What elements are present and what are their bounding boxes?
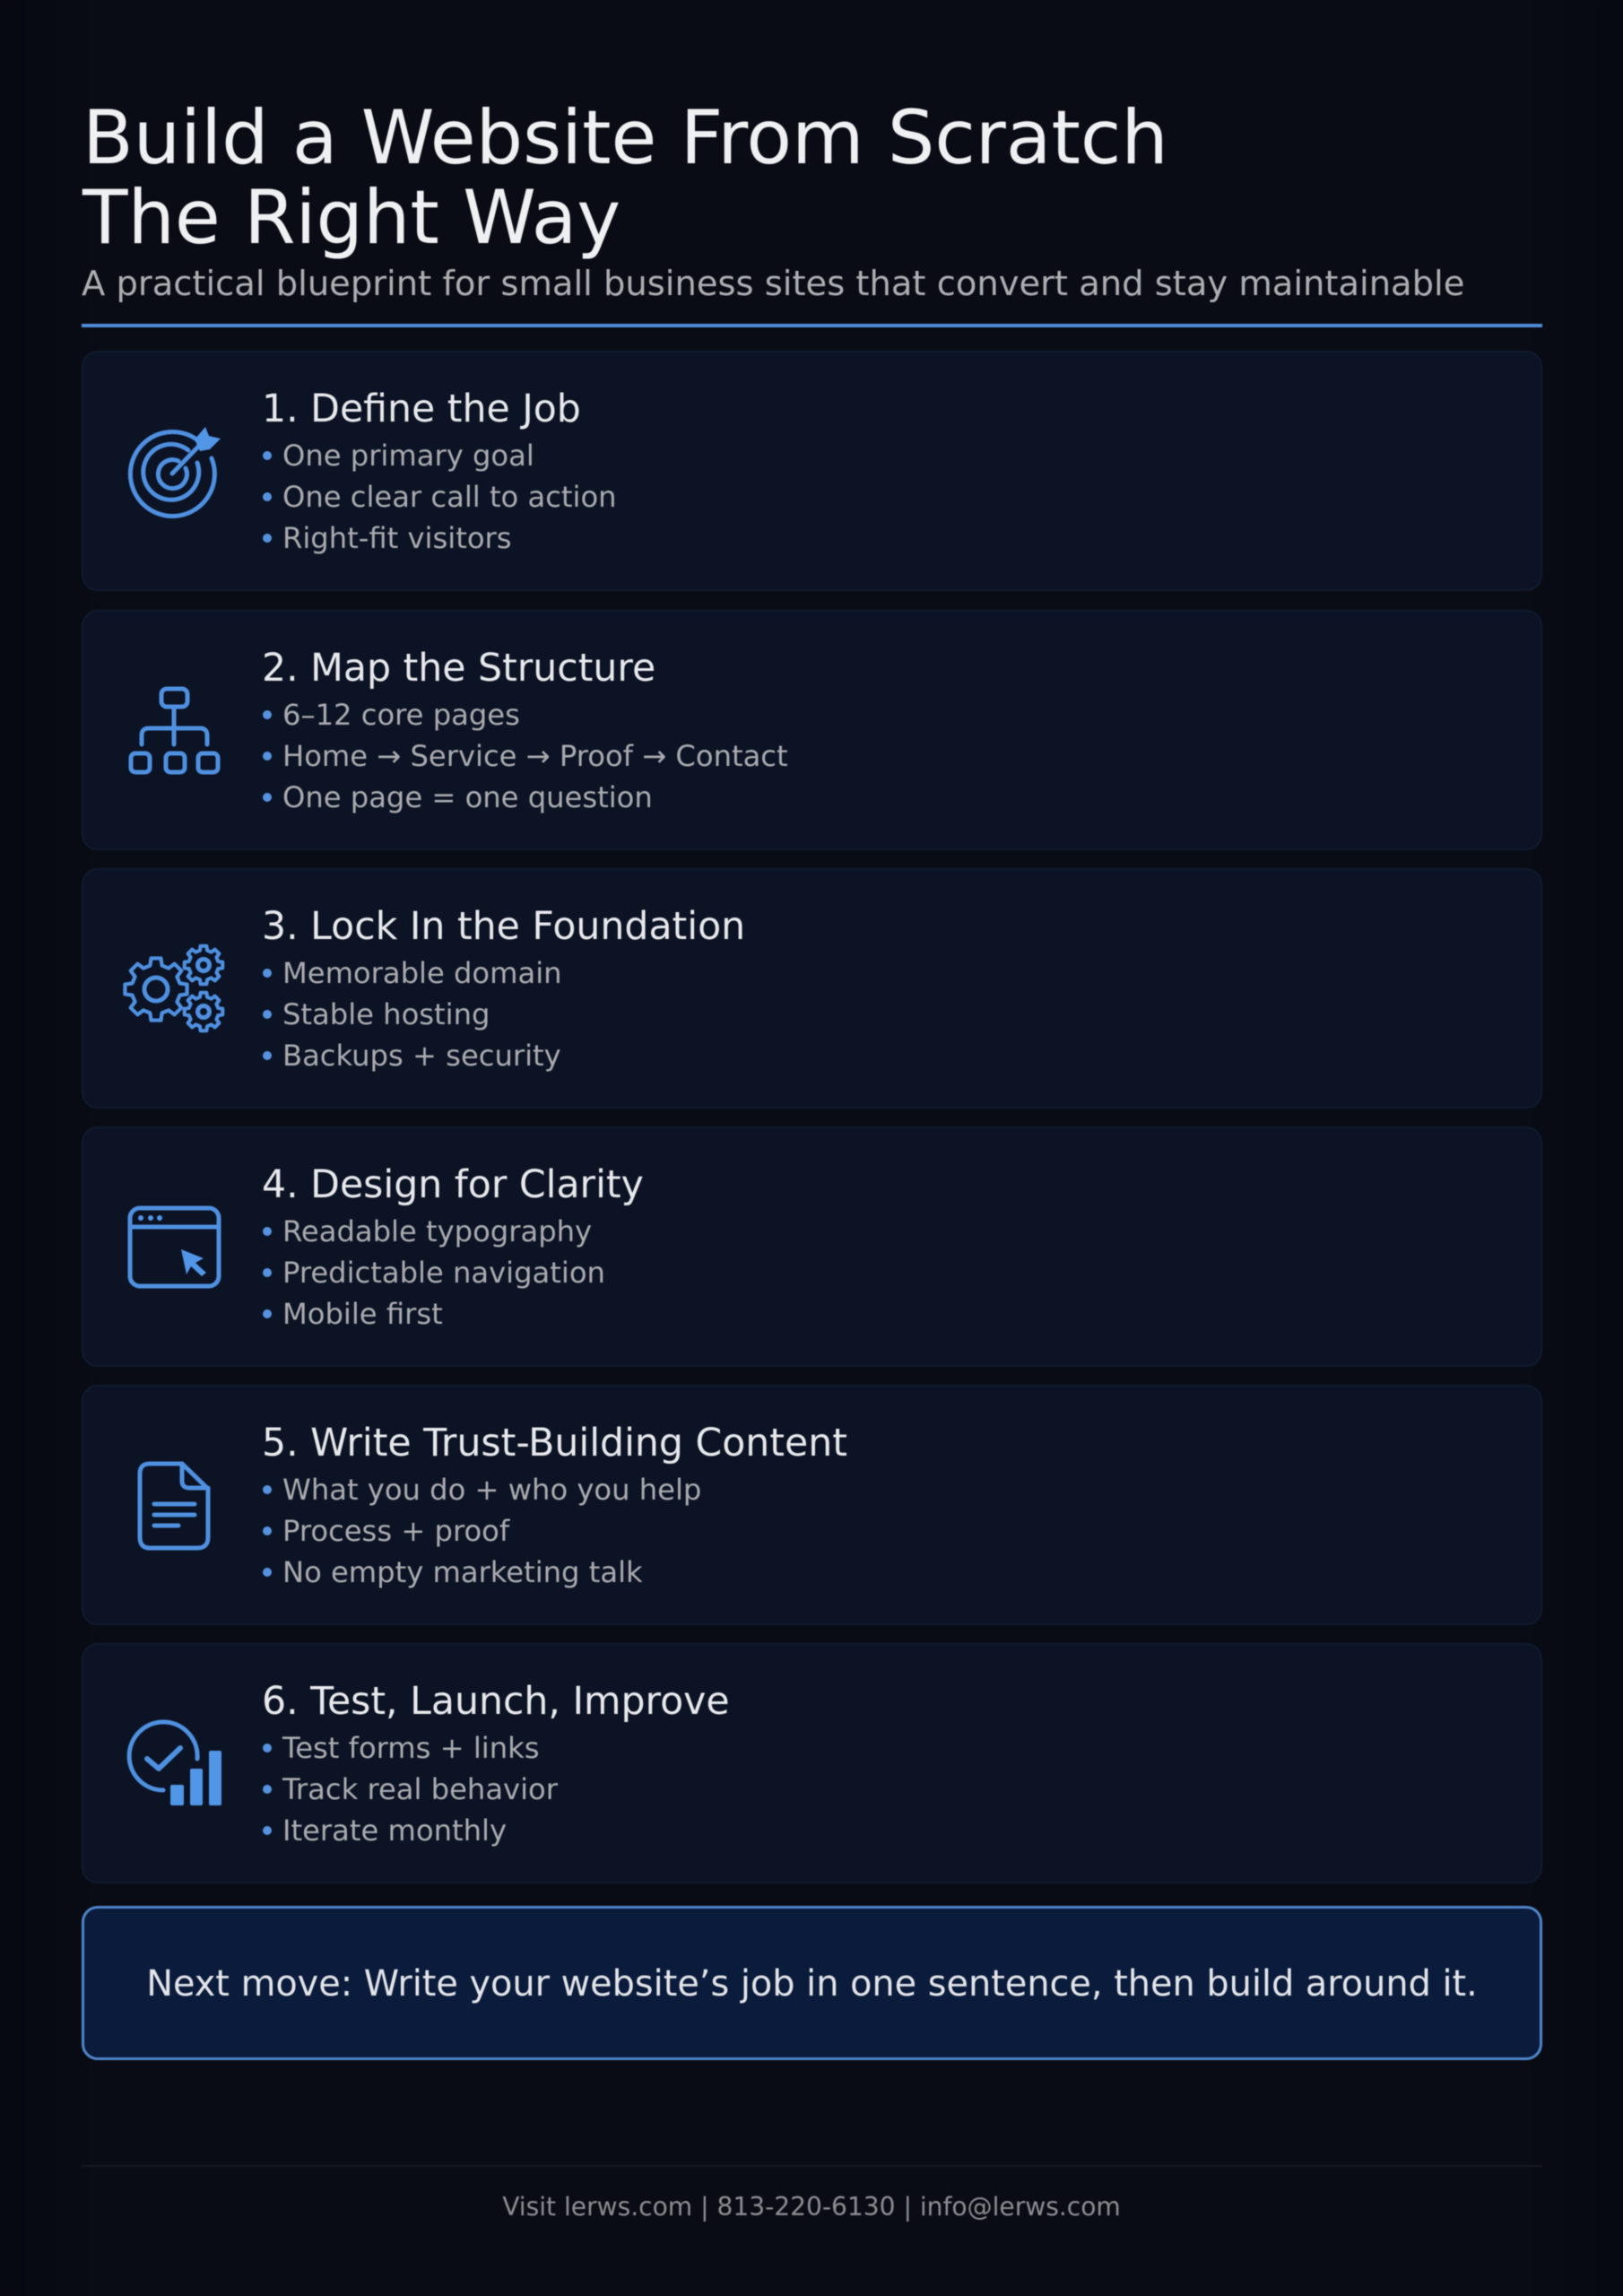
bullet list: step 4: [262, 1214, 605, 1331]
header rule: [82, 324, 1542, 327]
bullet list: step 2: Home → Service → Proof → Contact: [282, 739, 788, 773]
heading: step 4: 4. Design for Clarity: [262, 1162, 644, 1207]
bullet list: step 3: [262, 956, 562, 1073]
icon: check circle with bars: [126, 1718, 222, 1806]
panel: step 2: [82, 610, 1542, 850]
bullet list: step 2: [262, 698, 788, 814]
bullet list: step 6: Track real behavior: [282, 1772, 558, 1806]
bullet list: step 5: No empty marketing talk: [282, 1555, 643, 1589]
panel: step 4: [82, 1126, 1542, 1367]
heading: step 1: 1. Define the Job: [262, 387, 581, 431]
bullet list: step 3: Stable hosting: [282, 997, 490, 1031]
bullet list: step 1: One clear call to action: [282, 480, 617, 514]
heading: step 2: 2. Map the Structure: [262, 646, 655, 691]
title: The Right Way: [82, 174, 621, 261]
title: Build a Website From Scratch: [82, 94, 1168, 181]
panel: step 3: [82, 868, 1542, 1109]
footer contact line: Visit lerws.com | 813-220-6130 | info@lerws.com: [502, 2192, 1121, 2222]
panel: step 5: [82, 1385, 1542, 1625]
bullet list: step 1: One primary goal: [282, 439, 534, 473]
bullet list: step 3: Memorable domain: [282, 956, 562, 990]
icon: target with arrow: [127, 427, 221, 519]
bullet list: step 2: 6–12 core pages: [282, 698, 520, 732]
panel: step 6: [82, 1643, 1542, 1883]
bullet list: step 6: [262, 1731, 559, 1848]
heading: step 6: 6. Test, Launch, Improve: [262, 1679, 730, 1724]
bullet list: step 2: One page = one question: [282, 780, 653, 814]
bullet list: step 6: Iterate monthly: [282, 1813, 507, 1848]
icon: document: [136, 1460, 212, 1552]
bullet list: step 4: Mobile first: [282, 1297, 443, 1331]
footer divider: [82, 2165, 1542, 2167]
bullet list: step 5: What you do + who you help: [282, 1473, 701, 1507]
icon: gears: [122, 944, 226, 1033]
bullet list: step 1: [262, 439, 617, 555]
title: [81, 94, 1168, 261]
bullet list: step 5: Process + proof: [282, 1514, 509, 1548]
callout: next move: [82, 1906, 1542, 2060]
heading: step 5: 5. Write Trust-Building Content: [262, 1421, 847, 1465]
bullet list: step 1: Right-fit visitors: [282, 521, 512, 555]
panel: step 1: [82, 351, 1542, 591]
bullet list: step 6: Test forms + links: [282, 1731, 540, 1765]
bullet list: step 4: Predictable navigation: [282, 1256, 605, 1290]
bullet list: step 5: [262, 1473, 701, 1589]
icon: sitemap: [127, 685, 221, 775]
bullet list: step 4: Readable typography: [282, 1214, 592, 1248]
heading: step 3: 3. Lock In the Foundation: [262, 904, 745, 949]
icon: browser window with cursor: [127, 1205, 222, 1290]
callout text: Next move: Write your website’s job in one sentence, then build around it.: [146, 1963, 1478, 2005]
subtitle: A practical blueprint for small business sites that convert and stay maintainable: [82, 264, 1464, 304]
bullet list: step 3: Backups + security: [282, 1039, 561, 1073]
